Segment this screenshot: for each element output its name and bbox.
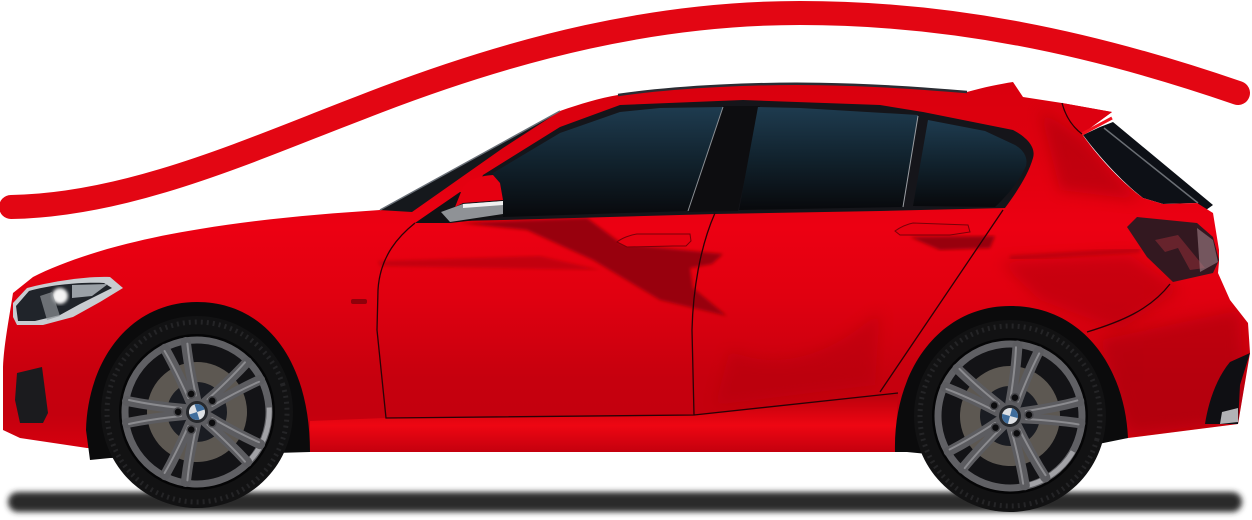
- B pillar: [688, 106, 760, 212]
- rear quarter window: [913, 120, 1027, 207]
- front intake: [15, 367, 48, 423]
- body shading, clipped to the silhouette: [378, 110, 1245, 435]
- side skirt: [310, 393, 898, 452]
- door shadow: [460, 218, 727, 316]
- roof rail: [618, 84, 967, 95]
- front wheel: [76, 291, 318, 520]
- rear wheel arch: [895, 306, 1128, 462]
- front wheel arch: [86, 302, 310, 460]
- spoiler crease: [1062, 103, 1112, 134]
- swoosh line: [11, 13, 1238, 207]
- headlight: [13, 277, 123, 325]
- mirror: [455, 175, 503, 207]
- fender badge: [351, 299, 367, 304]
- door handles: [617, 234, 691, 247]
- rear wiper spoiler and back glass: [1083, 122, 1213, 210]
- handle shadow rear: [910, 236, 995, 250]
- rear window: [739, 107, 918, 210]
- taillight: [1127, 217, 1219, 282]
- car body: [3, 82, 1250, 452]
- front window: [493, 107, 723, 217]
- mirror base: [415, 192, 503, 223]
- window frame: [460, 100, 1034, 221]
- panel seams: [377, 103, 1170, 418]
- windshield strip: [380, 111, 560, 212]
- rear wheel: [892, 298, 1128, 520]
- ground shadow: [8, 492, 1242, 512]
- rear diffuser: [1205, 353, 1250, 424]
